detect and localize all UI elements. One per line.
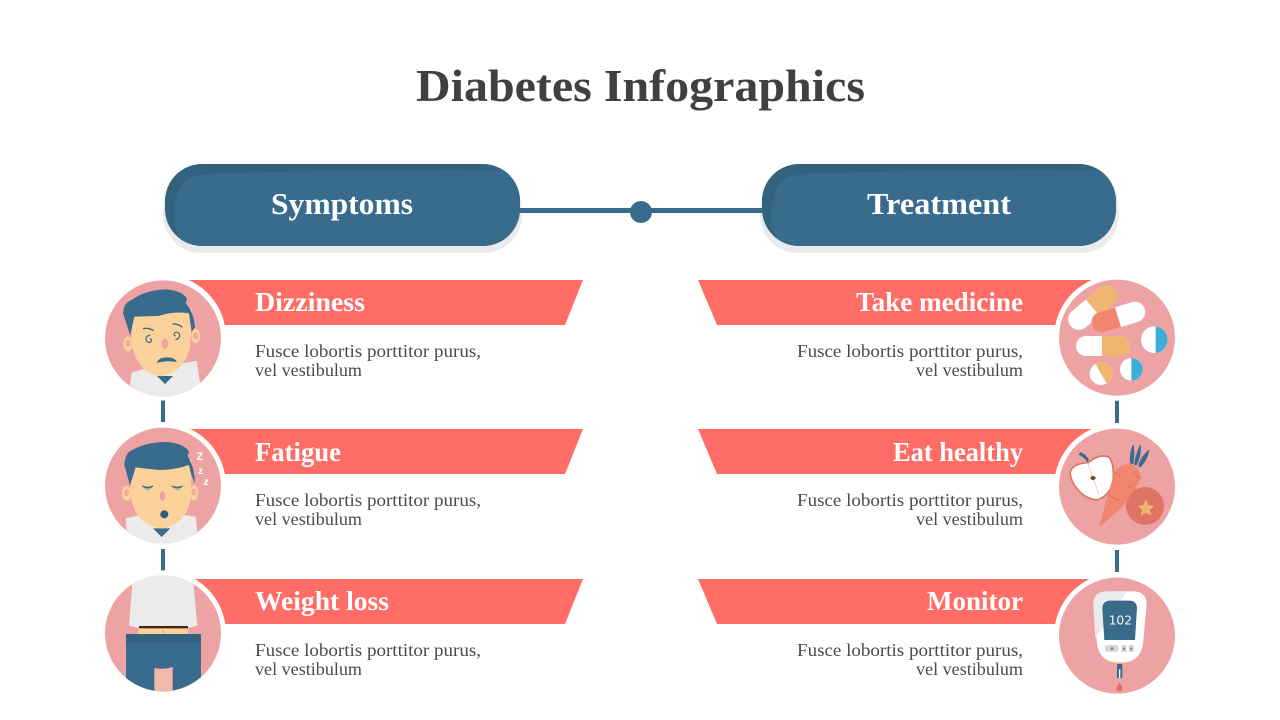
text: Monitor description: Fusce lobortis porttitor purus, — [797, 640, 1023, 660]
text: Dizziness description: Fusce lobortis porttitor purus, — [255, 341, 481, 361]
panel: Fatigue — [100, 423, 583, 549]
left connector stubs — [161, 400, 165, 571]
text: Weight loss description: Fusce lobortis porttitor purus, — [255, 640, 481, 660]
icon: sleepy face: z — [198, 466, 203, 477]
banner: Take medicine: Take medicine — [856, 287, 1023, 317]
icon: sleepy face: z — [204, 477, 209, 488]
right connector stubs — [1115, 400, 1119, 572]
icon: glucose meter: 102 — [1109, 613, 1132, 627]
panel: Monitor — [698, 573, 1180, 699]
icon: healthy food — [1059, 429, 1175, 545]
text: Fatigue description: Fusce lobortis porttitor purus, — [255, 490, 481, 510]
text: Weight loss description: vel vestibulum — [255, 659, 362, 679]
banner: Eat healthy: Eat healthy — [893, 437, 1023, 467]
icon: pills — [1059, 280, 1175, 396]
icon: glucose meter — [1059, 578, 1175, 694]
text: Eat healthy description — [797, 490, 1023, 529]
header: Treatment — [760, 164, 1126, 253]
text: Monitor description: vel vestibulum — [916, 659, 1023, 679]
banner: Monitor — [698, 573, 1180, 699]
banner: Weight loss: Weight loss — [255, 586, 389, 616]
text: Dizziness description — [255, 341, 481, 380]
title: Diabetes Infographics — [416, 60, 865, 111]
panel: Dizziness — [100, 274, 583, 400]
icon: dizzy face — [105, 280, 221, 400]
banner: Dizziness — [100, 274, 583, 400]
header: Symptoms: Symptoms — [271, 186, 413, 221]
text: Weight loss description — [255, 640, 481, 679]
banner: Monitor: Monitor — [927, 586, 1023, 616]
text: Take medicine description — [797, 341, 1023, 380]
panel: Take medicine — [698, 275, 1180, 401]
banner: Dizziness: Dizziness — [255, 287, 365, 317]
banner: Eat healthy — [698, 424, 1180, 550]
banner: Take medicine — [698, 275, 1180, 401]
panel: Weight loss — [100, 570, 583, 696]
header: Treatment: Treatment — [867, 186, 1012, 221]
text: Take medicine description: Fusce lobortis porttitor purus, — [797, 341, 1023, 361]
text: Monitor description — [797, 640, 1023, 679]
icon: loose trousers — [105, 572, 221, 694]
banner: Fatigue — [100, 423, 583, 549]
text: Eat healthy description: vel vestibulum — [916, 509, 1023, 529]
panel: Eat healthy — [698, 424, 1180, 550]
text: Take medicine description: vel vestibulum — [916, 360, 1023, 380]
banner: Fatigue: Fatigue — [255, 437, 341, 467]
icon: sleepy face: Z — [197, 451, 204, 463]
connector line between headers — [519, 201, 763, 223]
text: Fatigue description: vel vestibulum — [255, 509, 362, 529]
text: Fatigue description — [255, 490, 481, 529]
banner: Weight loss — [100, 570, 583, 696]
icon: sleepy face — [105, 428, 221, 548]
text: Dizziness description: vel vestibulum — [255, 360, 362, 380]
header: Symptoms — [163, 164, 530, 253]
text: Eat healthy description: Fusce lobortis porttitor purus, — [797, 490, 1023, 510]
